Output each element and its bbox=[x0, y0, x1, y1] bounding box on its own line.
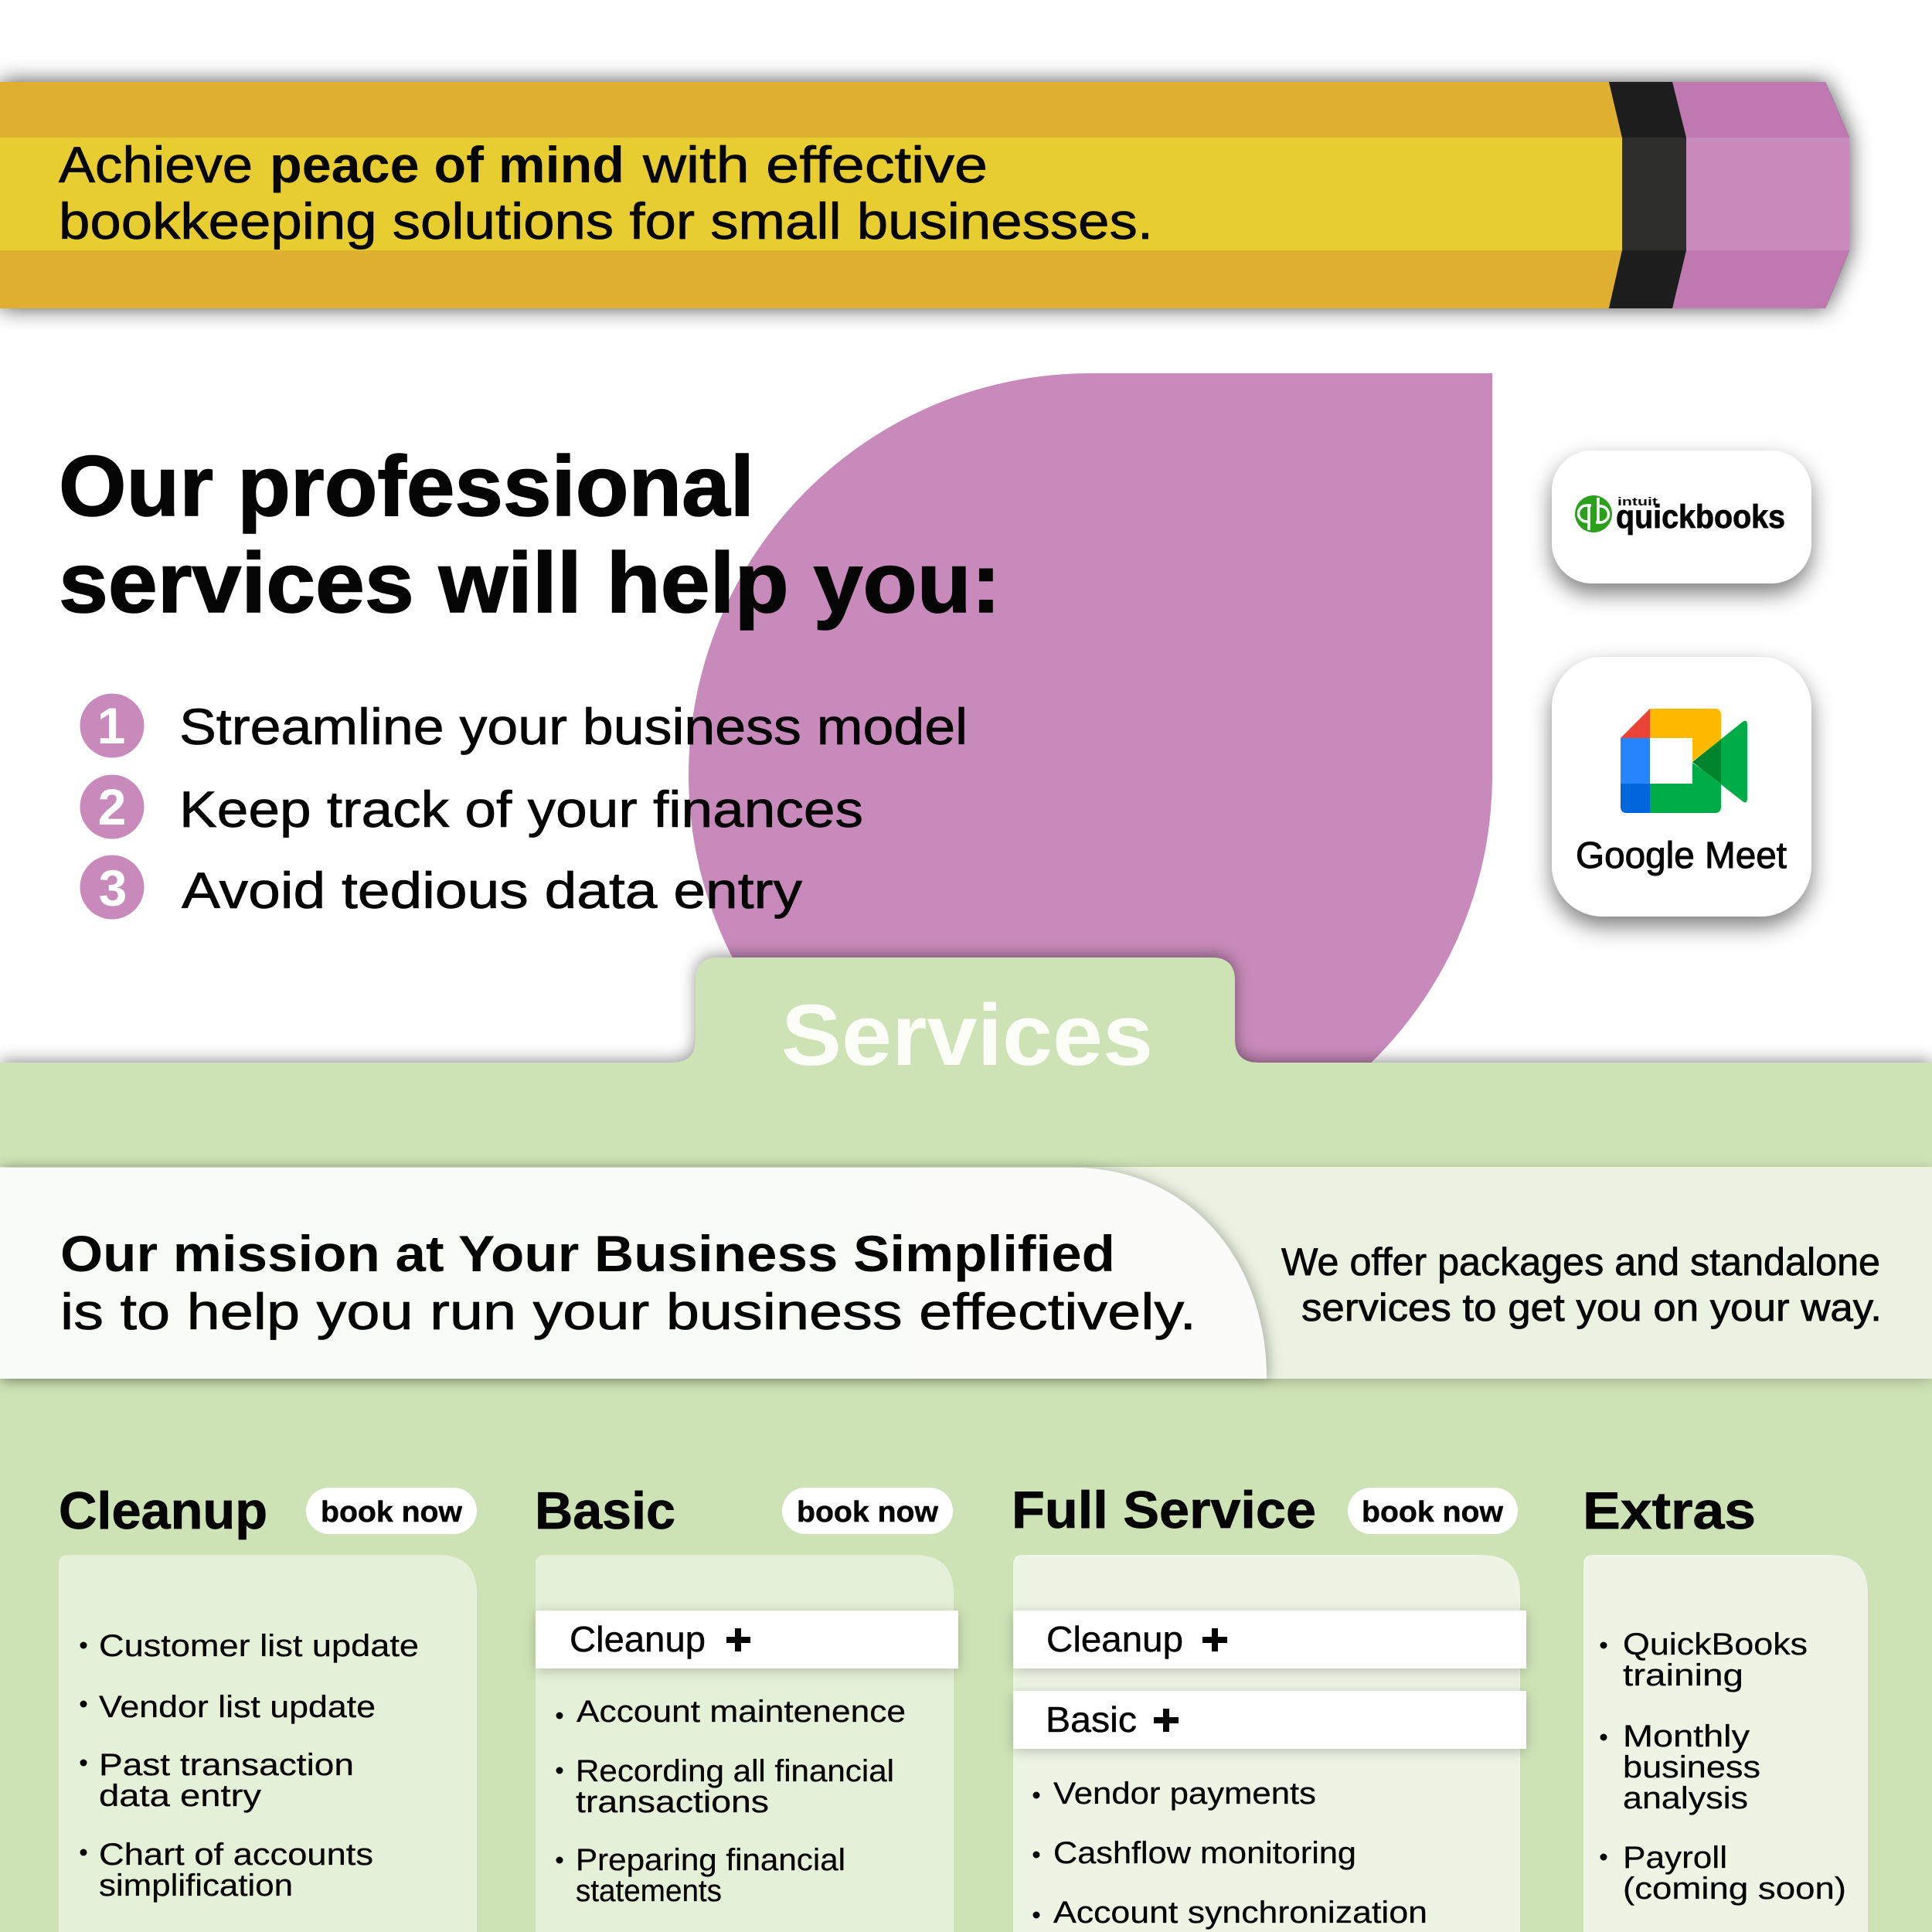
extras panel: (coming soon) bbox=[1623, 1872, 1846, 1906]
full service panel: Vendor payments bbox=[1053, 1777, 1316, 1811]
card: google meet: Google Meet bbox=[1576, 835, 1787, 876]
cleanup panel: Vendor list update bbox=[99, 1690, 376, 1724]
column: full service bbox=[1012, 1481, 1526, 1932]
cleanup panel: simplification bbox=[99, 1869, 293, 1903]
item 2: Keep track of your finances bbox=[179, 781, 863, 838]
banner tagline: bookkeeping solutions for small businesses. bbox=[59, 192, 1153, 250]
banner tagline: with effective bbox=[642, 136, 988, 193]
icon: google meet camera bbox=[1621, 709, 1747, 813]
item 3 bbox=[80, 855, 802, 920]
heading: our professional services: services will help you: bbox=[59, 536, 1001, 631]
extras panel: training bbox=[1623, 1658, 1743, 1692]
item 1: Streamline your business model bbox=[179, 698, 968, 755]
extras panel: QuickBooks bbox=[1623, 1628, 1808, 1662]
card: quickbooks bbox=[1552, 451, 1811, 583]
services tab title: Services bbox=[781, 987, 1153, 1083]
button: book now: book now bbox=[1362, 1496, 1503, 1529]
packages note bbox=[1281, 1240, 1882, 1329]
column: full service: Full Service bbox=[1012, 1481, 1316, 1539]
full service panel: Account synchronization bbox=[1053, 1896, 1427, 1930]
card: google meet bbox=[1552, 657, 1811, 917]
column: cleanup bbox=[59, 1481, 477, 1932]
pencil banner bbox=[0, 82, 1849, 308]
extras panel: business bbox=[1623, 1750, 1760, 1784]
column: extras: Extras bbox=[1583, 1481, 1756, 1540]
cleanup plus bar: Cleanup bbox=[1046, 1619, 1183, 1659]
basic panel bbox=[536, 1555, 958, 1932]
cleanup panel bbox=[59, 1555, 477, 1932]
column: basic bbox=[535, 1481, 958, 1932]
column: extras bbox=[1583, 1481, 1868, 1932]
cleanup plus bar bbox=[536, 1611, 958, 1668]
extras panel: Payroll bbox=[1623, 1841, 1727, 1875]
cleanup plus bar bbox=[1013, 1611, 1526, 1668]
full service panel: Cashflow monitoring bbox=[1053, 1836, 1356, 1870]
button: book now: book now bbox=[321, 1496, 462, 1529]
numbered benefits list bbox=[80, 694, 968, 920]
mission statement bbox=[60, 1225, 1196, 1340]
pencil shape bbox=[0, 82, 1849, 308]
banner tagline: Achieve bbox=[59, 136, 253, 193]
basic panel: transactions bbox=[576, 1785, 769, 1819]
extras panel: Monthly bbox=[1623, 1719, 1750, 1753]
services folder panel bbox=[0, 957, 1932, 1932]
card: quickbooks: intuit bbox=[1617, 495, 1658, 509]
extras panel: analysis bbox=[1623, 1781, 1748, 1815]
cleanup panel: Past transaction bbox=[99, 1748, 354, 1782]
mission band bbox=[0, 1167, 1932, 1379]
basic panel: Recording all financial bbox=[576, 1754, 894, 1788]
button: book now bbox=[306, 1488, 477, 1534]
cleanup panel: data entry bbox=[99, 1779, 261, 1813]
full service panel bbox=[1013, 1555, 1526, 1932]
column: cleanup: Cleanup bbox=[59, 1481, 267, 1540]
column: basic: Basic bbox=[535, 1481, 675, 1540]
cleanup plus bar: Cleanup bbox=[570, 1619, 706, 1659]
mission white tab bbox=[0, 1168, 1267, 1379]
basic panel: statements bbox=[576, 1874, 722, 1908]
extras panel bbox=[1583, 1555, 1868, 1932]
heading: our professional services bbox=[59, 439, 1001, 631]
banner tagline: peace of mind bbox=[270, 136, 624, 193]
item 1: 1 bbox=[97, 697, 125, 754]
mission statement: Our mission at Your Business Simplified bbox=[60, 1225, 1115, 1282]
basic panel: Account maintenence bbox=[577, 1695, 906, 1729]
packages note: We offer packages and standalone bbox=[1281, 1240, 1880, 1284]
basic plus bar: Basic bbox=[1046, 1699, 1137, 1740]
card: quickbooks: quickbooks bbox=[1616, 498, 1785, 536]
mission statement: is to help you run your business effectively. bbox=[60, 1283, 1196, 1340]
item 3: 3 bbox=[99, 859, 127, 917]
button: book now bbox=[782, 1488, 953, 1534]
banner tagline bbox=[59, 136, 1153, 250]
cleanup panel: Customer list update bbox=[99, 1629, 419, 1663]
purple teardrop background shape bbox=[689, 373, 1492, 1177]
heading: our professional services: Our professional bbox=[59, 439, 754, 534]
packages note: services to get you on your way. bbox=[1301, 1286, 1882, 1329]
cleanup panel: Chart of accounts bbox=[99, 1838, 373, 1872]
button: book now: book now bbox=[797, 1496, 938, 1529]
item 2: 2 bbox=[98, 778, 126, 835]
item 3: Avoid tedious data entry bbox=[182, 862, 802, 919]
basic plus bar bbox=[1013, 1691, 1526, 1749]
basic panel: Preparing financial bbox=[576, 1843, 845, 1877]
button: book now bbox=[1348, 1488, 1518, 1534]
icon: quickbooks logo bbox=[1575, 495, 1612, 532]
